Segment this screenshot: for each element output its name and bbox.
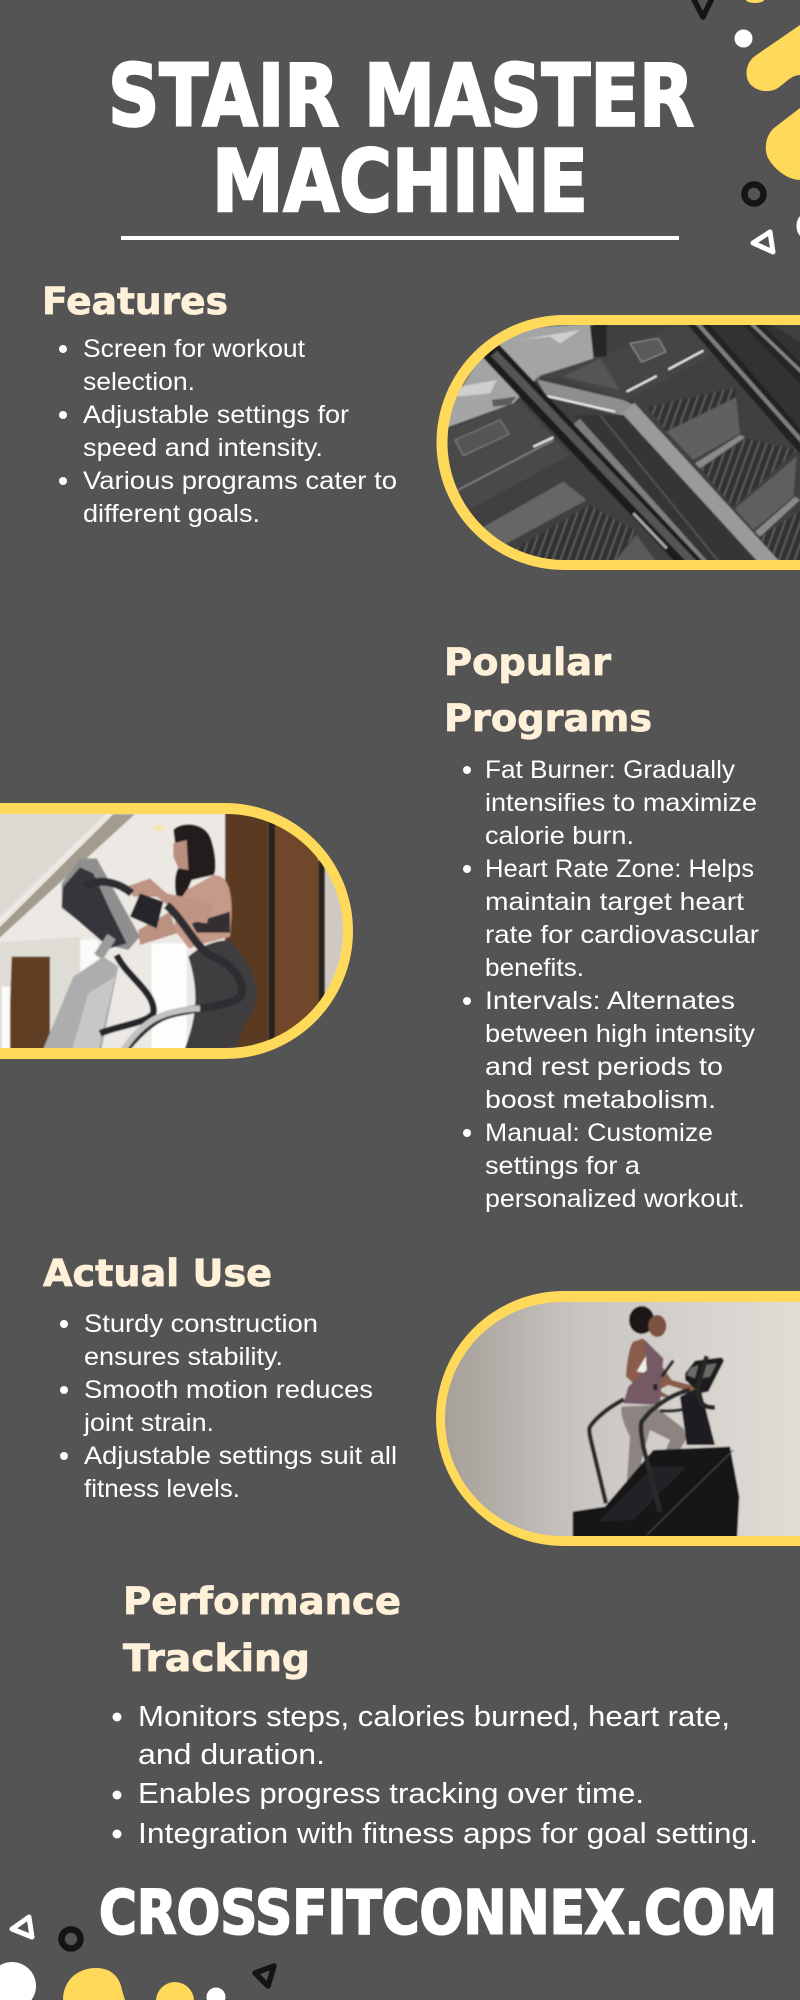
features list: Adjustable settings for [83, 401, 349, 429]
programs list: boost metabolism. [485, 1086, 716, 1114]
features list [59, 335, 397, 528]
actual use list: fitness levels. [84, 1475, 240, 1503]
programs list: Intervals: Alternates [485, 987, 735, 1015]
title underline [121, 236, 679, 240]
section: features [42, 280, 397, 528]
heading: features: Features [42, 280, 228, 323]
programs list: Manual: Customize [485, 1119, 713, 1147]
features list: selection. [83, 368, 195, 396]
actual use list: ensures stability. [84, 1343, 283, 1371]
features list: Screen for workout [83, 335, 305, 363]
actual use list: Adjustable settings suit all [84, 1442, 397, 1470]
section: performance tracking [112, 1580, 758, 1850]
heading: performance tracking [123, 1580, 401, 1680]
features list: speed and intensity. [83, 434, 323, 462]
decorative shapes: bottom left [0, 1917, 274, 2000]
actual use list: Sturdy construction [84, 1310, 318, 1338]
woman [173, 824, 216, 900]
programs list: benefits. [485, 954, 584, 982]
photo: escalator stairs [420, 313, 800, 573]
heading: actual use: Actual Use [43, 1252, 272, 1295]
features list: Various programs cater to [83, 467, 397, 495]
programs list: maintain target heart [485, 888, 744, 916]
programs list: Heart Rate Zone: Helps [485, 855, 754, 883]
machine [680, 1387, 715, 1445]
performance list [112, 1701, 758, 1850]
performance list: Integration with fitness apps for goal setting. [138, 1818, 758, 1850]
title: MACHINE [212, 132, 588, 232]
programs list: between high intensity [485, 1020, 756, 1048]
heading: performance tracking: Performance [123, 1580, 401, 1623]
woman [629, 1306, 654, 1334]
actual use list: Smooth motion reduces [84, 1376, 373, 1404]
section: actual use [43, 1252, 397, 1503]
section: popular programs [444, 641, 759, 1213]
machine [62, 858, 140, 950]
heading: popular programs [444, 641, 652, 740]
photo: woman on elliptical [0, 803, 353, 1059]
programs list: settings for a [485, 1152, 640, 1180]
programs list: calorie burn. [485, 822, 634, 850]
actual use list: joint strain. [83, 1409, 214, 1437]
programs list: rate for cardiovascular [485, 921, 759, 949]
heading: popular programs: Programs [444, 697, 652, 740]
actual use list [60, 1310, 397, 1503]
programs list: and rest periods to [485, 1053, 723, 1081]
decorative shapes: top right [691, 0, 800, 252]
photo: woman on stair climber [433, 1291, 800, 1547]
title [108, 46, 694, 232]
performance list: Monitors steps, calories burned, heart rate, [138, 1701, 730, 1733]
heading: popular programs: Popular [444, 641, 612, 684]
heading: performance tracking: Tracking [123, 1637, 310, 1680]
features list: different goals. [83, 500, 260, 528]
programs list [463, 756, 759, 1213]
title: STAIR MASTER [108, 46, 694, 146]
programs list: personalized workout. [485, 1185, 745, 1213]
programs list: Fat Burner: Gradually [485, 756, 736, 784]
programs list: intensifies to maximize [485, 789, 757, 817]
performance list: Enables progress tracking over time. [138, 1778, 644, 1810]
performance list: and duration. [138, 1739, 325, 1771]
